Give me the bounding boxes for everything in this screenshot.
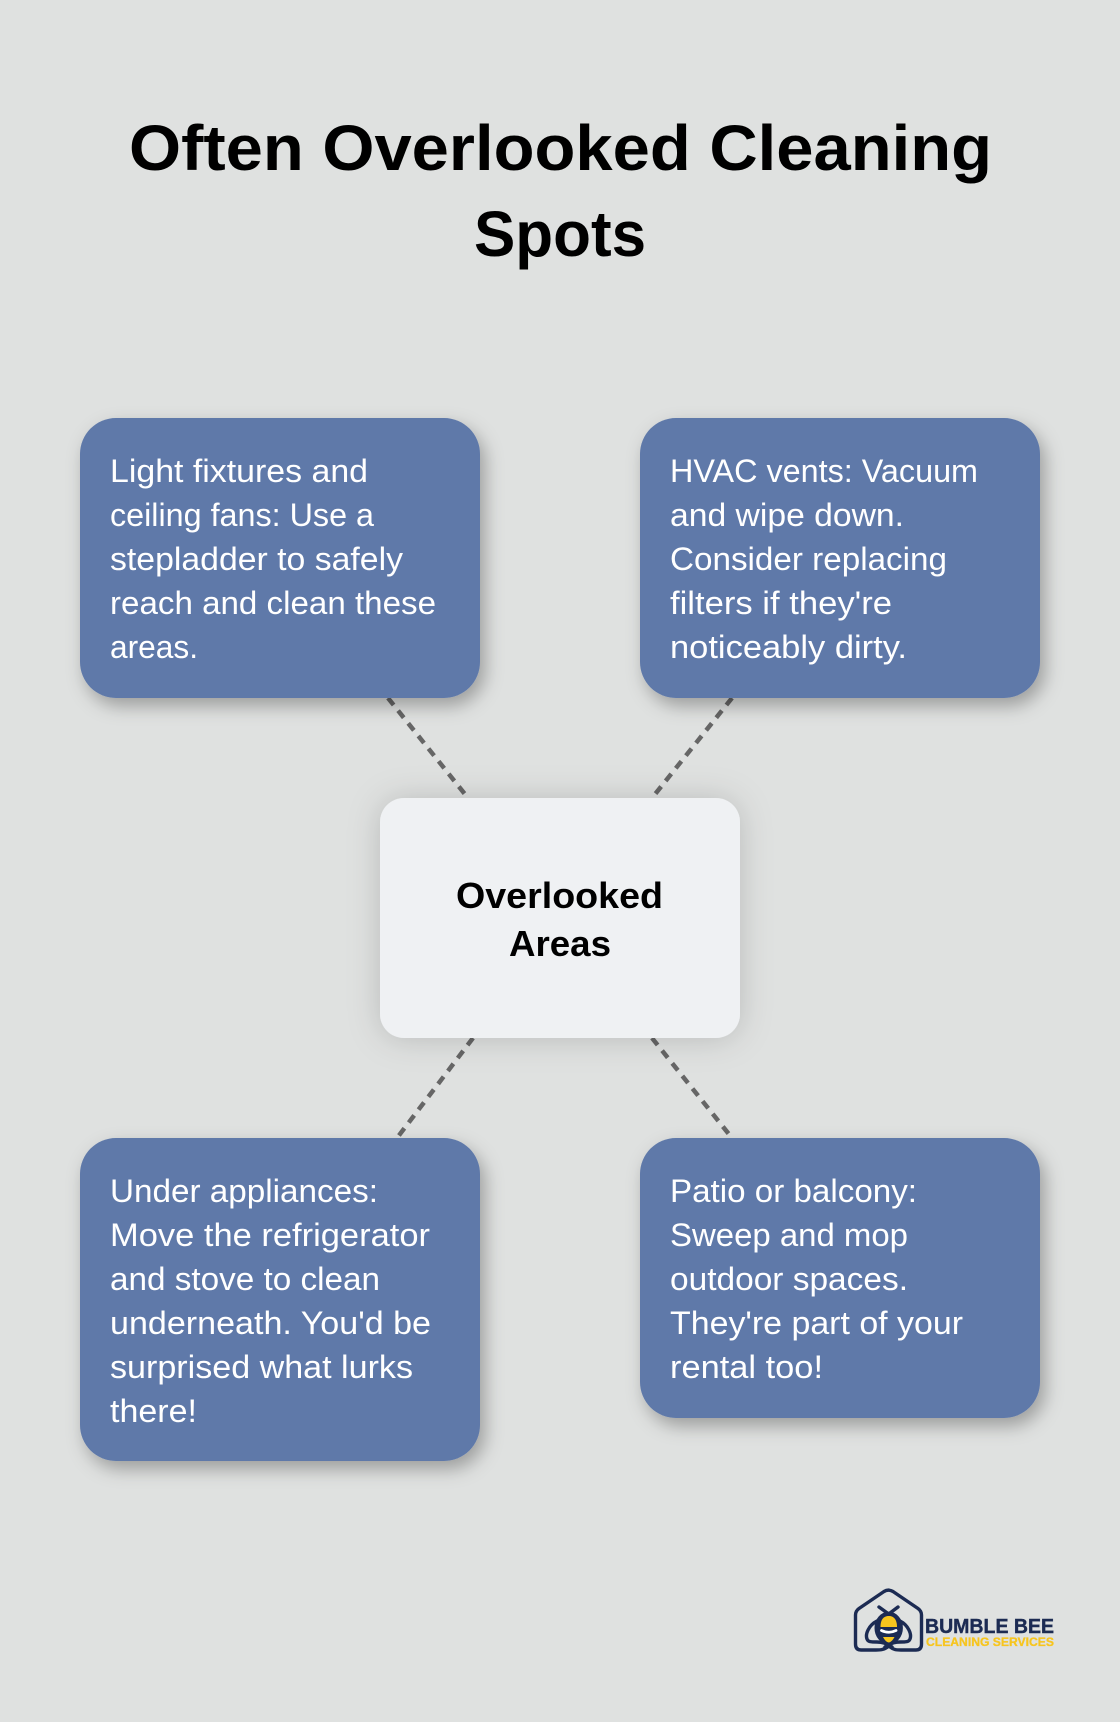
panel: light fixtures and ceiling fans: Light fixtures and xyxy=(110,453,368,489)
logo wordmark: BUMBLE BEE xyxy=(925,1616,1054,1638)
panel: under appliances: Under appliances: xyxy=(110,1173,378,1209)
panel: light fixtures and ceiling fans xyxy=(80,418,480,698)
panel: center overlooked areas: Overlooked xyxy=(456,875,663,916)
panel: HVAC vents xyxy=(640,418,1040,698)
panel: patio or balcony: rental too! xyxy=(670,1349,823,1385)
panel: under appliances: there! xyxy=(110,1393,197,1429)
connector: light fixtures to center xyxy=(388,698,468,798)
panel: under appliances: underneath. You'd be xyxy=(110,1305,431,1341)
title: Spots xyxy=(474,198,646,270)
panel: HVAC vents: Consider replacing xyxy=(670,541,947,577)
panel: under appliances: Move the refrigerator xyxy=(110,1217,430,1253)
panel: center overlooked areas xyxy=(380,798,740,1038)
panel: patio or balcony xyxy=(640,1138,1040,1418)
panel: under appliances xyxy=(80,1138,480,1461)
connector: HVAC vents to center xyxy=(652,698,732,798)
panel: light fixtures and ceiling fans: ceiling fans: Use a xyxy=(110,497,374,533)
panel: light fixtures and ceiling fans: stepladder to safely xyxy=(110,541,403,577)
panel: patio or balcony: Patio or balcony: xyxy=(670,1173,917,1209)
panel: under appliances: and stove to clean xyxy=(110,1261,380,1297)
panel: HVAC vents: filters if they're xyxy=(670,585,892,621)
panel: patio or balcony: outdoor spaces. xyxy=(670,1261,908,1297)
connector: under appliances to center xyxy=(397,1038,473,1138)
panel: under appliances: surprised what lurks xyxy=(110,1349,413,1385)
panel: HVAC vents: and wipe down. xyxy=(670,497,904,533)
logo tagline: CLEANING SERVICES xyxy=(926,1635,1054,1649)
panel: light fixtures and ceiling fans: reach and clean these xyxy=(110,585,436,621)
panel: HVAC vents: noticeably dirty. xyxy=(670,629,907,665)
title xyxy=(129,112,992,270)
connector: patio to center xyxy=(652,1038,732,1138)
title: Often Overlooked Cleaning xyxy=(129,112,992,184)
logo: Bumble Bee Cleaning Services xyxy=(856,1590,1054,1650)
panel: patio or balcony: They're part of your xyxy=(670,1305,963,1341)
panel: light fixtures and ceiling fans: areas. xyxy=(110,629,198,665)
icon: house with bee xyxy=(856,1590,922,1650)
panel: center overlooked areas: Areas xyxy=(509,923,611,964)
panel: patio or balcony: Sweep and mop xyxy=(670,1217,908,1253)
panel: HVAC vents: HVAC vents: Vacuum xyxy=(670,453,978,489)
